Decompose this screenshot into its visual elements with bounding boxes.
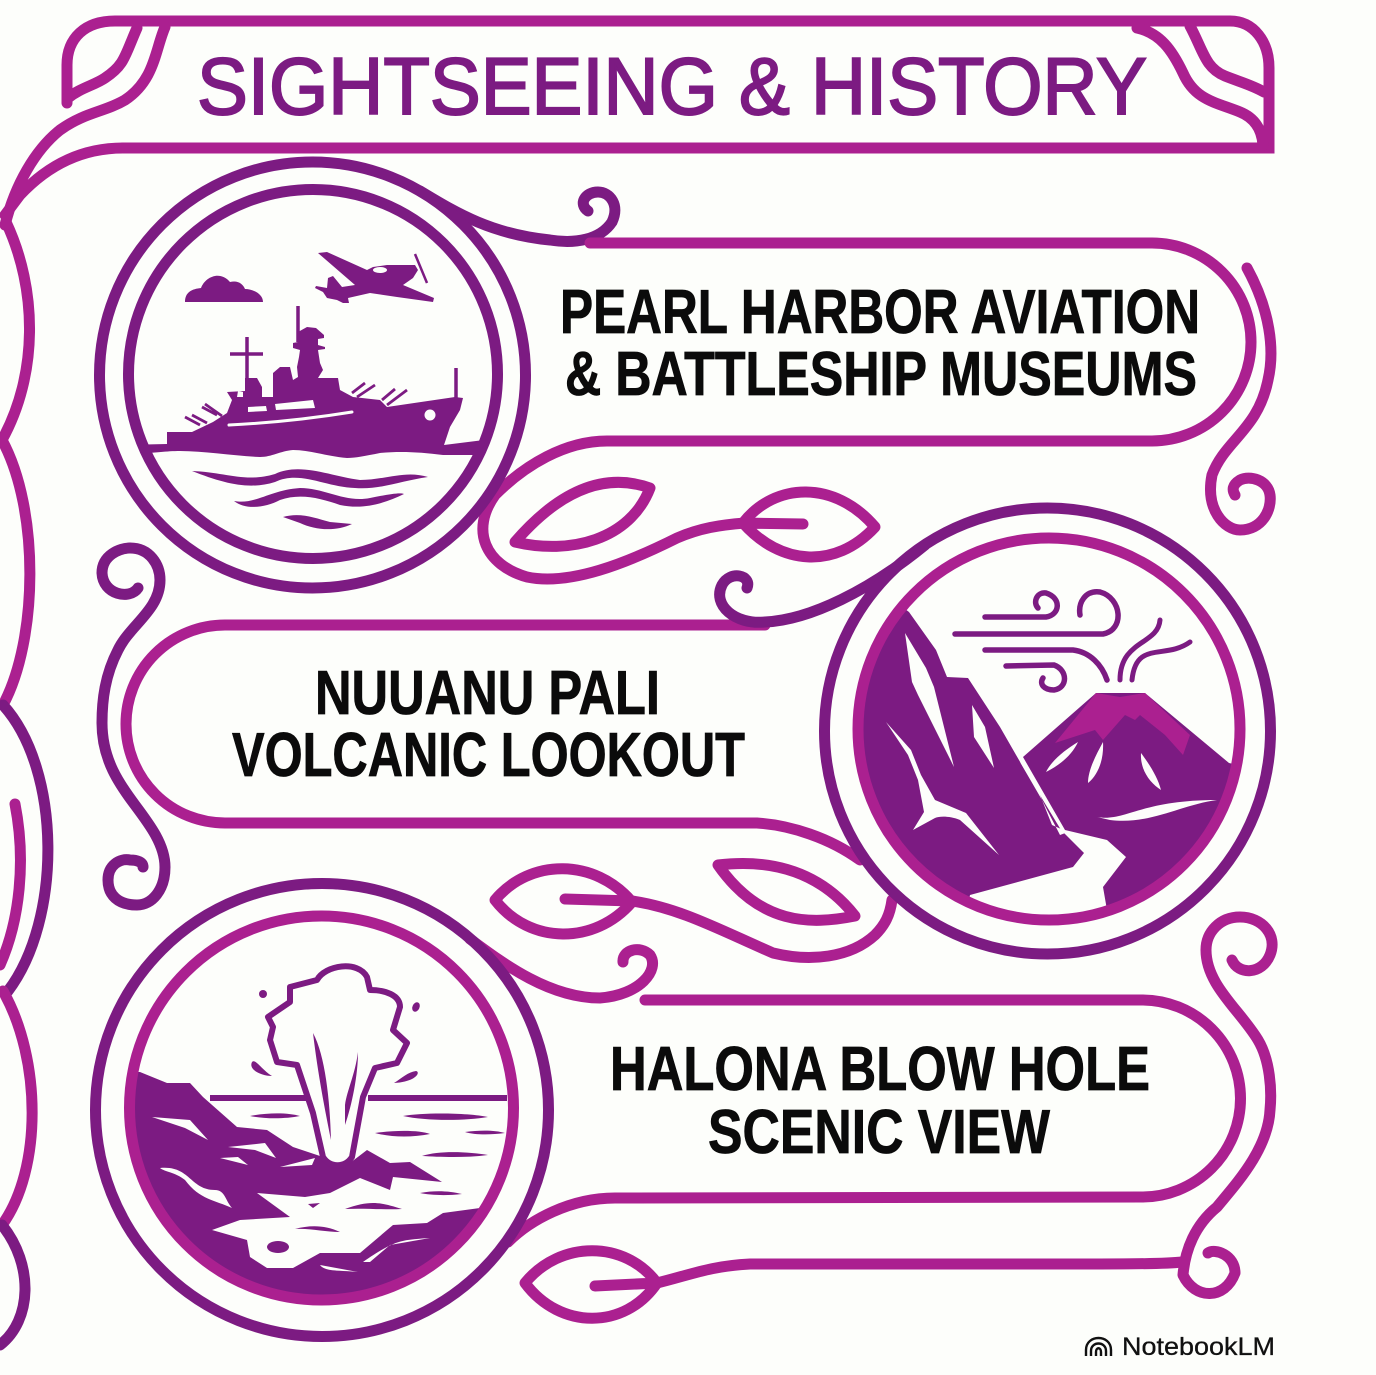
panel: Nuuanu Pali xyxy=(102,508,1270,957)
icon: blow hole geyser xyxy=(90,884,560,1340)
label: Halona Blow Hole: HALONA BLOW HOLE xyxy=(610,1035,1150,1104)
title text: SIGHTSEEING & HISTORY xyxy=(197,42,1147,132)
label: Pearl Harbor: & BATTLESHIP MUSEUMS xyxy=(565,340,1197,409)
icon: NotebookLM mark xyxy=(1086,1338,1111,1356)
icon: cloud xyxy=(185,276,263,302)
label: Pearl Harbor xyxy=(560,278,1200,409)
leaves: Pearl Harbor xyxy=(515,482,875,557)
panel: Pearl Harbor xyxy=(100,162,1271,588)
icon: steam xyxy=(1120,620,1190,680)
icon: battleship xyxy=(148,306,480,458)
label: Nuuanu Pali: VOLCANIC LOOKOUT xyxy=(232,721,745,790)
leaves: Nuuanu Pali xyxy=(495,863,892,957)
icon: wind xyxy=(955,592,1118,690)
panel: Halona Blow Hole xyxy=(90,884,1272,1340)
pill frame: Nuuanu Pali xyxy=(102,545,925,905)
pill frame: Pearl Harbor xyxy=(420,191,1271,579)
label: Nuuanu Pali xyxy=(232,659,745,790)
leaf: bottom xyxy=(525,1251,657,1318)
icon: volcano and cliffs xyxy=(824,508,1270,954)
label: Halona Blow Hole xyxy=(610,1035,1150,1167)
icon: plane xyxy=(315,252,434,303)
icon: geyser plume xyxy=(268,966,407,1165)
NotebookLM logo: NotebookLM xyxy=(1122,1333,1275,1361)
pill frame: Halona Blow Hole xyxy=(470,917,1272,1294)
icon: waves xyxy=(192,469,428,529)
icon: coastline xyxy=(135,1072,479,1294)
title banner xyxy=(5,21,1269,225)
icon: volcano xyxy=(1023,693,1232,906)
label: Nuuanu Pali: NUUANU PALI xyxy=(315,659,660,728)
label: Halona Blow Hole: SCENIC VIEW xyxy=(708,1098,1050,1167)
icon: battleship and plane xyxy=(100,162,526,588)
icon: sea dashes xyxy=(250,1113,505,1232)
label: Pearl Harbor: PEARL HARBOR AVIATION xyxy=(560,278,1200,347)
icon: horizon line xyxy=(210,1095,507,1101)
left border vine xyxy=(0,222,48,1345)
icon: cliff xyxy=(864,610,1084,897)
